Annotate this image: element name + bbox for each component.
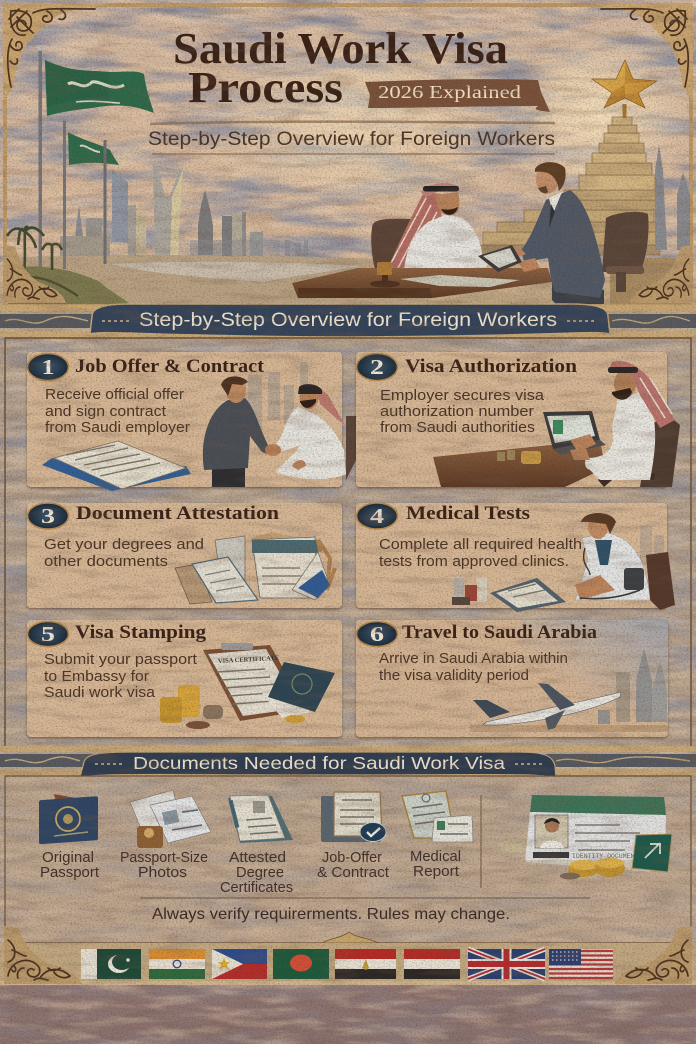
flag: Egypt xyxy=(335,949,396,979)
section band: steps xyxy=(0,304,696,337)
document label: job offer: Job-Offer xyxy=(322,850,382,866)
person: businessman xyxy=(203,376,270,487)
desk xyxy=(433,440,605,487)
step 4 badge xyxy=(356,503,398,529)
panel: step 6 xyxy=(356,620,668,737)
icon: gold coins xyxy=(160,685,305,729)
flag: Philippines xyxy=(212,949,267,979)
flag: United Kingdom xyxy=(468,949,545,979)
step 5 title: Visa Stamping xyxy=(75,622,207,643)
year ribbon: 2026 Explained xyxy=(378,82,521,102)
step 1 description xyxy=(45,386,190,436)
footer flags band xyxy=(0,943,696,985)
banner: Step-by-Step Overview for Foreign Workers xyxy=(139,310,557,331)
document label: certificates: Attested xyxy=(229,850,286,866)
banner: Documents Needed for Saudi Work Visa xyxy=(133,753,505,773)
vertical divider xyxy=(480,795,482,888)
step 1 badge: 1 xyxy=(42,355,54,379)
flag: Pakistan xyxy=(81,949,141,979)
banner xyxy=(90,304,610,337)
step 6 badge xyxy=(356,622,398,646)
centre crest xyxy=(322,932,378,943)
document label: medical: Medical xyxy=(410,849,461,865)
step 5 description: Saudi work visa xyxy=(44,684,156,701)
step 2 badge xyxy=(356,354,398,380)
corner ornament: top left xyxy=(3,3,107,103)
handshake xyxy=(265,444,281,456)
contract tablet xyxy=(478,245,522,272)
Saudi flag: large xyxy=(45,60,154,116)
chair: right xyxy=(602,212,649,292)
step 2 badge: 2 xyxy=(370,355,384,379)
step 5 badge xyxy=(28,622,68,646)
step 1 title: Job Offer & Contract xyxy=(75,356,265,377)
icon: contract stack xyxy=(42,441,191,491)
ground xyxy=(6,255,690,304)
chair: seated employer xyxy=(371,219,412,272)
panel: step 2 xyxy=(356,352,680,487)
document: medical report xyxy=(402,791,473,842)
hero title: Saudi Work Visa xyxy=(173,24,508,73)
document label: passport: Passport xyxy=(40,865,99,881)
right towers xyxy=(655,145,690,250)
person: doctor xyxy=(575,513,650,600)
flag pole: large xyxy=(37,45,43,268)
step 6 description: the visa validity period xyxy=(379,667,529,684)
corner ornament: top right xyxy=(589,3,693,103)
panel: documents xyxy=(5,776,691,943)
Saudi flag: small xyxy=(68,132,119,165)
skyline xyxy=(60,165,308,256)
chair xyxy=(646,552,675,610)
palm trees xyxy=(7,226,62,272)
person: Saudi employer at laptop xyxy=(570,361,675,480)
disclaimer: Always verify requirerments. Rules may change. xyxy=(152,906,510,923)
cups xyxy=(497,450,541,464)
banner xyxy=(80,752,556,778)
icon: clipboard visa form xyxy=(203,643,307,721)
hero illustration panel xyxy=(5,5,691,306)
hero subtitle: Step-by-Step Overview for Foreign Workers xyxy=(148,129,555,150)
corner ornament: bottom right xyxy=(614,926,692,984)
year ribbon xyxy=(365,79,550,112)
person: Saudi employer xyxy=(276,384,346,479)
step 5 badge: 5 xyxy=(41,622,55,646)
panel: step 1 xyxy=(27,352,356,491)
icon: document pile xyxy=(175,532,335,604)
step 4 badge: 4 xyxy=(370,504,385,528)
step 1 description: from Saudi employer xyxy=(45,419,190,436)
step 2 title: Visa Authorization xyxy=(405,356,577,377)
step 5 description xyxy=(44,651,198,701)
step 3 title: Document Attestation xyxy=(76,503,279,524)
document label: certificates: Degree xyxy=(236,865,284,881)
chair xyxy=(640,415,680,487)
step 1 badge xyxy=(28,354,68,380)
document label: photos: Photos xyxy=(138,865,187,881)
flag: United States xyxy=(549,949,613,979)
gavel xyxy=(370,262,400,288)
document label: passport: Original xyxy=(42,850,94,866)
step 4 description: Complete all required health xyxy=(379,536,582,553)
flag pole: small xyxy=(63,121,66,269)
star xyxy=(592,60,657,118)
hero frame xyxy=(5,5,691,306)
step 2 description: authorization number xyxy=(380,403,534,420)
step 1 description: and sign contract xyxy=(45,403,167,420)
stepped pyramid xyxy=(470,117,663,255)
step 6 description: Arrive in Saudi Arabia within xyxy=(379,650,568,667)
flag pole: rear xyxy=(104,140,106,264)
document label: passport xyxy=(40,850,99,881)
hero title xyxy=(173,24,508,112)
icon: clipboard xyxy=(490,578,566,612)
panel: step 3 xyxy=(27,503,342,608)
step 1 description: Receive official offer xyxy=(45,386,184,403)
step 4 title: Medical Tests xyxy=(406,503,530,524)
document: photos xyxy=(130,790,211,848)
skyline xyxy=(640,525,664,565)
document label: job offer: & Contract xyxy=(317,865,389,881)
corner ornament: hero bottom right xyxy=(630,245,692,303)
visa card illustration: IDENTITY DOCUMENT xyxy=(572,853,638,860)
icon: medical bottles xyxy=(452,578,487,605)
flag: Yemen xyxy=(404,949,460,979)
step 1 skyline xyxy=(248,362,308,430)
step 4 description: tests from approved clinics. xyxy=(379,553,569,570)
icon: clipboard visa form: VISA CERTIFICATE xyxy=(218,655,279,665)
step 3 badge: 3 xyxy=(41,504,55,528)
document label: photos xyxy=(120,850,208,881)
document: certificates xyxy=(228,795,293,843)
ground xyxy=(470,725,668,732)
corner ornament: bottom left xyxy=(4,926,82,984)
step 5 description: Submit your passport xyxy=(44,651,198,668)
document: job offer contract xyxy=(321,792,386,842)
corner ornament: hero bottom left xyxy=(4,245,66,303)
seated Saudi employer xyxy=(388,183,490,272)
standing man in suit xyxy=(508,162,605,304)
chair xyxy=(346,416,356,480)
step 3 badge xyxy=(28,503,68,529)
section band: documents xyxy=(0,746,696,778)
document label: job offer xyxy=(317,850,389,881)
document label: medical: Report xyxy=(413,864,459,880)
step 2 description: Employer secures visa xyxy=(380,387,545,404)
document: passport xyxy=(39,794,98,844)
gold coins xyxy=(560,858,625,880)
icon: laptop xyxy=(543,411,606,455)
document label: certificates: Certificates xyxy=(220,880,293,896)
icon: airplane xyxy=(473,683,621,730)
document label: medical xyxy=(410,849,461,880)
step 3 description: other documents xyxy=(44,553,168,570)
step 2 description xyxy=(380,387,545,436)
desk xyxy=(292,268,552,298)
flag: India xyxy=(149,949,205,979)
step 5 description: to Embassy for xyxy=(44,668,149,685)
step 6 badge: 6 xyxy=(370,622,384,646)
step 6 title: Travel to Saudi Arabia xyxy=(402,622,598,643)
step 6 description xyxy=(379,650,568,684)
skyline xyxy=(598,648,667,724)
step 3 description xyxy=(44,536,204,570)
step 3 description: Get your degrees and xyxy=(44,536,204,553)
step 4 description xyxy=(379,536,582,570)
icon: passport xyxy=(262,662,335,718)
document label: photos: Passport-Size xyxy=(120,850,208,866)
panel: step 4 xyxy=(356,503,675,612)
panel: steps frame xyxy=(5,338,691,748)
document label: certificates xyxy=(220,850,293,896)
flag: Bangladesh xyxy=(273,949,329,979)
visa card illustration xyxy=(498,795,672,872)
panel: step 5 xyxy=(27,620,342,737)
step 2 description: from Saudi authorities xyxy=(380,419,535,436)
hero title: Process xyxy=(188,63,343,112)
horizontal rule xyxy=(140,897,590,899)
blue sky corner xyxy=(520,620,668,710)
